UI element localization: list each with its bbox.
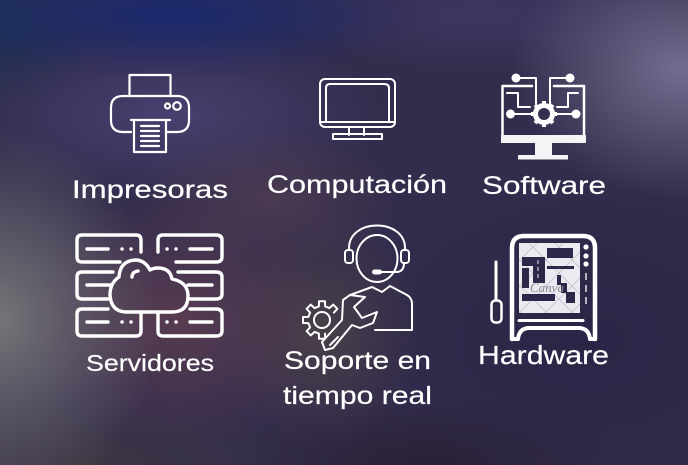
label: Computación: Computación xyxy=(267,171,447,199)
icon: server racks with cloud xyxy=(77,235,222,336)
label: Soporte en tiempo real: tiempo real xyxy=(283,382,432,410)
item: Software xyxy=(482,74,606,200)
icon: support agent with wrench and gear xyxy=(303,226,412,350)
label: Soporte en tiempo real xyxy=(283,347,432,410)
icon: monitor with circuit and gear xyxy=(501,74,586,160)
watermark text: Canva xyxy=(530,280,564,295)
label: Servidores: Servidores xyxy=(86,350,214,376)
label: Hardware: Hardware xyxy=(478,340,609,370)
item: Impresoras xyxy=(72,75,228,204)
item: Hardware xyxy=(478,236,609,370)
label: Software: Software xyxy=(482,172,606,200)
icon: printer xyxy=(111,75,189,152)
label: Impresoras: Impresoras xyxy=(72,176,228,204)
item: Computación xyxy=(267,79,447,199)
item: Soporte en tiempo real xyxy=(283,226,432,410)
icon: monitor xyxy=(320,79,395,139)
label: Soporte en tiempo real: Soporte en xyxy=(284,347,431,375)
item: Servidores xyxy=(77,235,222,376)
